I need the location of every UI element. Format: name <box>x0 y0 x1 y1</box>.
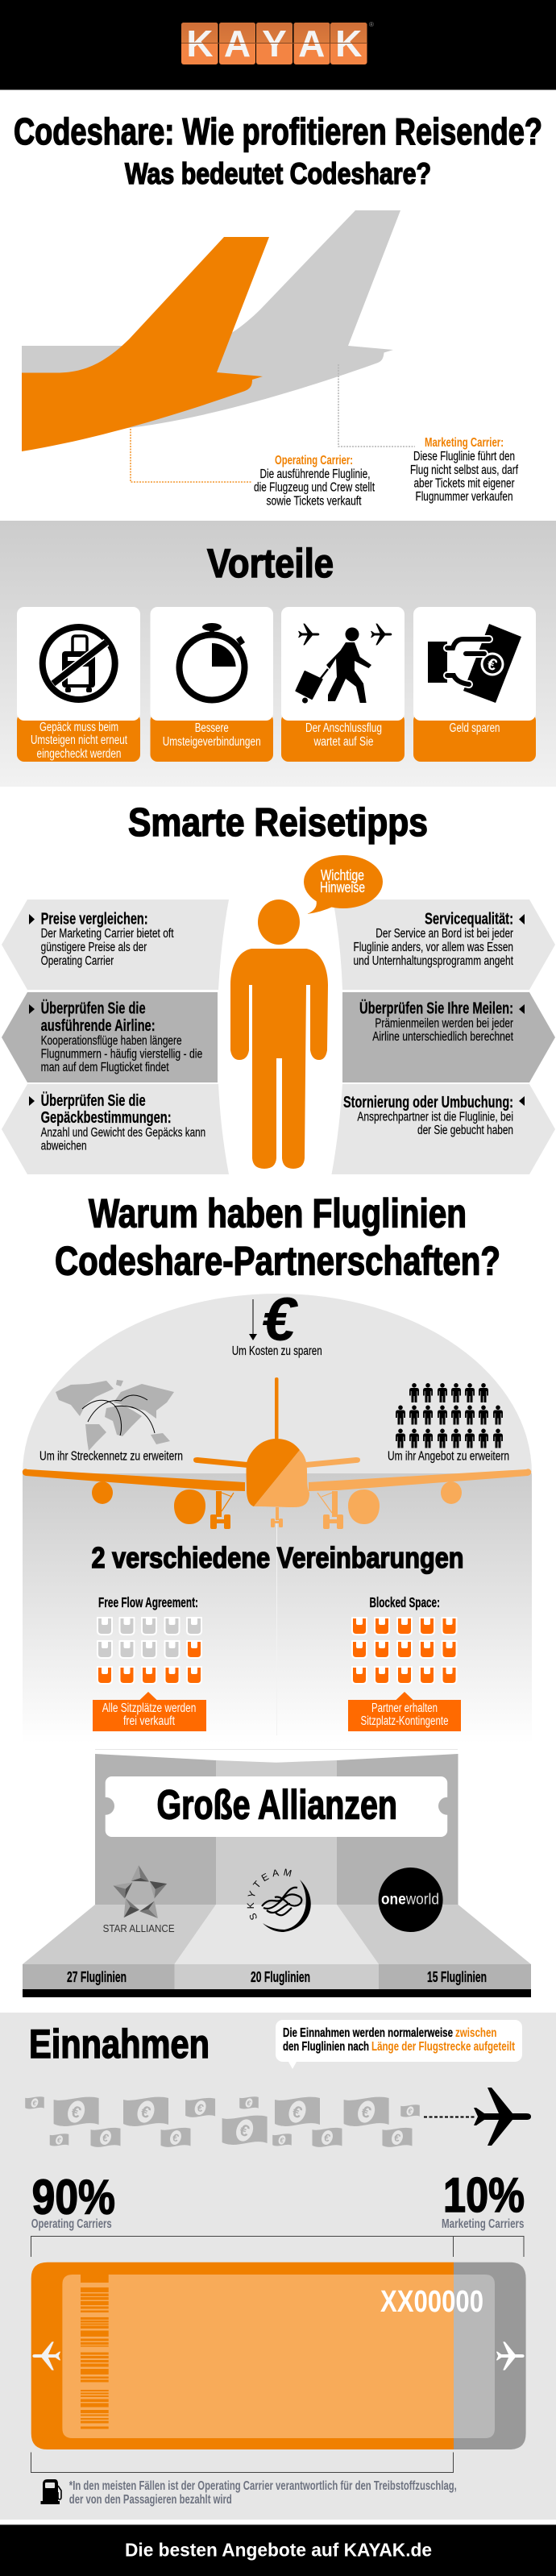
tip panel: Gepäckbestimmungen: abweichen <box>41 1140 87 1153</box>
KAYAK logo: K <box>186 23 214 64</box>
heading: 2 verschiedene Vereinbarungen: 2 verschiedene Vereinbarungen <box>92 1541 464 1574</box>
text: operating carrier: die Flugzeug und Crew stellt <box>254 481 376 495</box>
logo: SkyTeam: SKYTEAM <box>247 1868 292 1920</box>
caption: Gepäck muss beim <box>39 721 118 734</box>
orange operating carrier tail <box>22 237 269 451</box>
footer bar <box>0 2524 556 2576</box>
stat: 90%: 90% <box>32 2171 115 2225</box>
KAYAK logo: A <box>298 23 325 64</box>
header bar with logo <box>0 0 556 90</box>
tip panel: Stornierung: Ansprechpartner ist die Fluglinie, bei <box>357 1111 513 1124</box>
label: Blocked Space: Blocked Space: <box>369 1594 440 1610</box>
seat map: blocked space <box>351 1617 458 1685</box>
tip panel: Servicequalität: und Unternhaltungsprogramm angeht <box>353 954 514 968</box>
tip panel: ausführende Airline: Flugnummern - häufig vierstellig - die <box>41 1048 202 1062</box>
illustration: two tail fins <box>22 210 400 451</box>
caption: Umsteigen nicht erneut <box>31 733 128 747</box>
caption: wartet auf Sie <box>313 735 374 749</box>
card: baggage <box>17 607 140 762</box>
stat: 90%: Operating Carriers <box>31 2217 112 2231</box>
speech bubble: Wichtige Hinweise <box>304 855 383 914</box>
icon: world map with routes <box>56 1380 174 1451</box>
money flags: € <box>237 2121 251 2141</box>
barcode <box>81 2275 109 2429</box>
logo: Star Alliance: STAR ALLIANCE <box>103 1922 175 1934</box>
money flags: € <box>322 2131 333 2145</box>
callout: Partner erhalten <box>348 1692 461 1731</box>
callout: Alle Sitzplätze: frei verkauft <box>123 1714 176 1728</box>
caption <box>31 721 128 761</box>
heading: Warum haben Fluglinien Codeshare-Partnerschaften: Warum haben Fluglinien <box>89 1191 467 1236</box>
money flags: € <box>359 2103 373 2122</box>
panel: reasons dome and gradient <box>23 1294 532 1743</box>
card: connecting flight <box>281 607 405 762</box>
text: marketing carrier <box>410 436 519 504</box>
label: Free Flow Agreement: Free Flow Agreement: <box>98 1594 198 1610</box>
footnote <box>69 2479 457 2507</box>
speech callout: revenue split <box>276 2020 522 2069</box>
caption: Umsteigeverbindungen <box>163 735 261 749</box>
text: marketing carrier: Diese Fluglinie führt den <box>413 450 515 463</box>
icon: hand with banknote <box>428 624 521 703</box>
KAYAK logo: K <box>335 23 362 64</box>
logo: oneworld <box>379 1868 443 1932</box>
panel: alliances stage <box>23 1754 531 1997</box>
money flags: € <box>392 2131 403 2145</box>
text: marketing carrier: Flugnummer verkaufen <box>416 490 512 504</box>
callout: Alle Sitzplätze: Alle Sitzplätze werden <box>102 1701 196 1715</box>
icon: white plane right <box>496 2341 525 2370</box>
panel: Einnahmen <box>0 2013 556 2520</box>
stat: 10%: 10% <box>443 2168 525 2222</box>
money flags: € <box>196 2101 205 2115</box>
speech callout: revenue split: Die Einnahmen werden normalerweise <box>283 2026 453 2040</box>
speech bubble: Wichtige Hinweise: Hinweise <box>320 879 365 895</box>
logo: SkyTeam <box>247 1868 311 1932</box>
speech callout: revenue split: den Fluglinien nach <box>283 2040 369 2054</box>
tip panel: ausführende Airline: Überprüfen Sie die <box>41 999 146 1018</box>
money flags: € <box>139 2103 153 2122</box>
caption: Streckennetz: Um ihr Streckennetz zu erweitern <box>39 1450 183 1464</box>
seat map: free flow <box>97 1617 202 1685</box>
heading: Einnahmen: Einnahmen <box>29 2021 210 2067</box>
bottom bracket <box>31 2452 453 2473</box>
icon: hand with banknote: € <box>485 655 500 675</box>
orange person <box>230 900 328 1169</box>
speech callout: revenue split: zwischen <box>455 2026 496 2040</box>
tip panel: Preise vergleichen: Der Marketing Carrier bietet oft <box>41 927 174 941</box>
speech bubble: Wichtige Hinweise: Wichtige <box>321 866 364 883</box>
money flags: € <box>171 2131 181 2145</box>
money flags: € <box>101 2131 111 2145</box>
tip panel: Gepäckbestimmungen: Anzahl und Gewicht des Gepäcks kann <box>41 1126 205 1140</box>
icon: stopwatch <box>179 623 245 700</box>
text: operating carrier: Die ausführende Fluglinie, <box>259 467 371 481</box>
dashed flight path <box>424 2117 475 2118</box>
tip panel: Servicequalität: Der Service an Bord ist bei jeder <box>376 927 513 941</box>
caption: Bessere <box>195 721 229 735</box>
flight number: XX00000 <box>380 2285 483 2319</box>
footer bar: Die besten Angebote auf KAYAK.de <box>125 2540 432 2561</box>
caption <box>305 721 382 749</box>
caption: Geld sparen <box>450 721 500 735</box>
caption <box>163 721 261 749</box>
heading: Warum haben Fluglinien Codeshare-Partnerschaften <box>55 1191 500 1284</box>
airplane front view <box>23 1377 531 1529</box>
tip panel: Stornierung: der Sie gebucht haben <box>417 1124 513 1137</box>
footnote: der von den Passagieren bezahlt wird <box>69 2493 232 2507</box>
tip panel: Meilen: Prämienmeilen werden bei jeder <box>375 1017 513 1031</box>
icon: crowd of people <box>396 1383 503 1448</box>
tip panel: Gepäckbestimmungen: Überprüfen Sie die <box>41 1091 146 1110</box>
tip panel: ausführende Airline: man auf dem Flugticket findet <box>41 1061 169 1074</box>
KAYAK logo: Y <box>262 23 287 64</box>
tip panel: Preise vergleichen: günstigere Preise als der <box>41 941 147 954</box>
callout: Partner erhalten: Sitzplatz-Kontingente <box>361 1714 448 1728</box>
tip panel: Servicequalität <box>333 900 555 990</box>
callout: Alle Sitzplätze <box>93 1692 206 1731</box>
icon: euro with down arrow <box>249 1286 299 1354</box>
light half <box>254 1450 531 1529</box>
tip panel: Servicequalität: Servicequalität: <box>425 910 513 929</box>
subtitle: Was bedeutet Codeshare? <box>125 157 431 190</box>
money flags: € <box>246 2098 252 2108</box>
label: 20 Fluglinien: 20 Fluglinien <box>251 1969 310 1985</box>
money flags: € <box>31 2098 38 2108</box>
icon: no baggage <box>43 627 115 700</box>
KAYAK logo: A <box>224 23 251 64</box>
text: operating carrier: Operating Carrier: <box>275 454 353 467</box>
dark half <box>23 1377 300 1529</box>
card: connections <box>150 607 273 762</box>
caption: eingecheckt werden <box>37 747 121 761</box>
tip panel: Gepäckbestimmungen <box>2 1084 229 1174</box>
tip panel: Preise vergleichen: Preise vergleichen: <box>41 910 148 929</box>
ticket banner <box>97 1776 456 1837</box>
label: 15 Fluglinien: 15 Fluglinien <box>427 1969 487 1985</box>
text: operating carrier <box>254 454 376 509</box>
text: marketing carrier: aber Tickets mit eigener <box>414 477 514 491</box>
callout: Partner erhalten: Partner erhalten <box>371 1701 438 1715</box>
icon: traveller with suitcase <box>296 624 392 703</box>
caption: Der Anschlussflug <box>305 721 382 735</box>
KAYAK logo: ® <box>369 21 374 28</box>
tip panel: Stornierung <box>332 1084 555 1174</box>
card: save money <box>413 607 536 762</box>
money flags <box>25 2096 420 2147</box>
tip panel: Meilen <box>342 992 555 1082</box>
text: marketing carrier: Marketing Carrier: <box>425 436 504 450</box>
dotted leader: marketing carrier <box>338 364 415 447</box>
money flags: € <box>56 2135 63 2145</box>
caption: Angebot: Um ihr Angebot zu erweitern <box>388 1450 509 1464</box>
money flags: € <box>68 2103 83 2122</box>
tip panel: Preise vergleichen <box>2 900 229 990</box>
boarding pass <box>31 2262 526 2449</box>
top bracket <box>31 2236 524 2257</box>
tip panel: Preise vergleichen: Operating Carrier <box>41 954 114 968</box>
tip panel: ausführende Airline <box>2 992 218 1082</box>
icon: airplane <box>474 2088 531 2146</box>
heading: Große Allianzen: Große Allianzen <box>156 1782 397 1828</box>
money flags: € <box>290 2103 305 2122</box>
dotted leader: operating carrier <box>131 429 251 482</box>
money flags: € <box>279 2135 285 2145</box>
KAYAK logo <box>181 21 374 64</box>
icon: white plane left <box>32 2341 60 2370</box>
heading: Vorteile: Vorteile <box>207 541 334 586</box>
money flags: € <box>407 2106 413 2116</box>
panel: Vorteile <box>0 521 556 787</box>
caption: Um Kosten zu sparen: Um Kosten zu sparen <box>232 1344 322 1358</box>
tip panel: ausführende Airline: ausführende Airline: <box>41 1016 156 1035</box>
text: marketing carrier: Flug nicht selbst aus, darf <box>410 463 519 477</box>
logo: Star Alliance <box>103 1864 175 1934</box>
icon: fuel pump <box>40 2479 61 2504</box>
tip panel: Meilen: Airline unterschiedlich berechnet <box>372 1030 514 1044</box>
stat: 10%: Marketing Carriers <box>442 2217 525 2231</box>
text: operating carrier: sowie Tickets verkauft <box>266 495 362 509</box>
icon: euro with down arrow: € <box>262 1286 299 1354</box>
gray marketing carrier tail <box>22 210 400 435</box>
label: 27 Fluglinien: 27 Fluglinien <box>67 1969 127 1985</box>
heading: Smarte Reisetipps: Smarte Reisetipps <box>128 801 428 845</box>
tip panel: Gepäckbestimmungen: Gepäckbestimmungen: <box>41 1108 172 1127</box>
logo: oneworld: oneworld <box>381 1892 439 1909</box>
tip panel: ausführende Airline: Kooperationsflüge haben längere <box>41 1034 182 1048</box>
